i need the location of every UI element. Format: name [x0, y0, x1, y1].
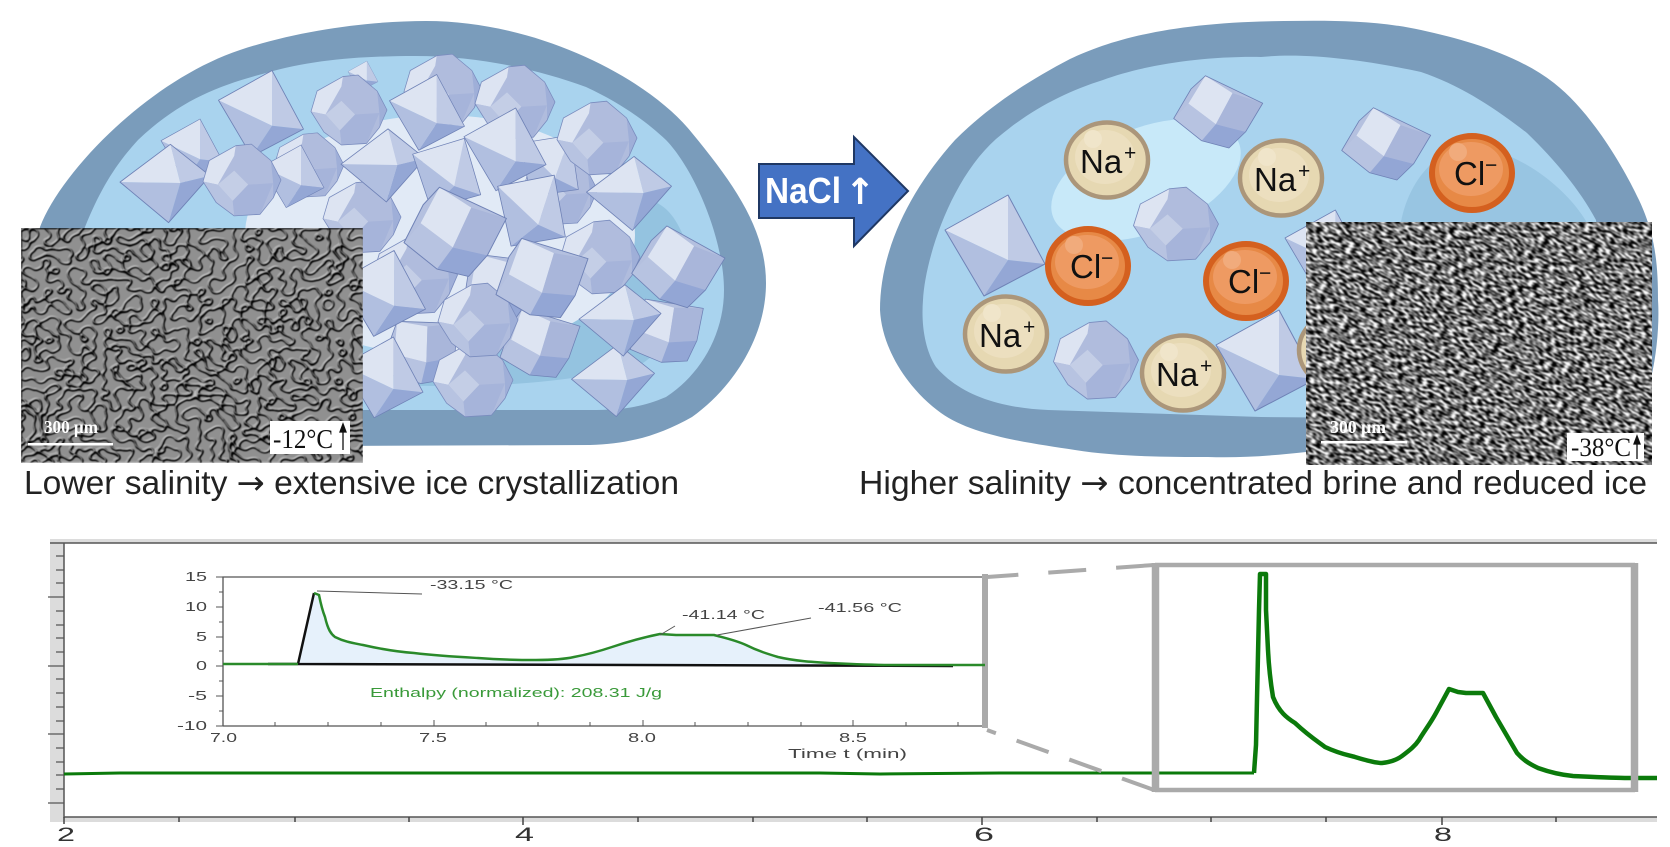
micrograph texture	[1306, 222, 1652, 465]
ion: Cl-: Cl	[1070, 248, 1101, 285]
inset x labels: 7.0	[210, 730, 237, 745]
ion: Cl-	[1432, 136, 1512, 210]
ion: partly hidden Na+	[1299, 312, 1381, 388]
annotation arrows	[317, 591, 811, 635]
peak label: -41.14 °C	[682, 608, 765, 622]
inner shaded region	[380, 200, 688, 386]
ice crystals	[945, 72, 1434, 411]
ion: Na+	[1142, 336, 1224, 410]
integration baseline	[268, 593, 953, 666]
scale label: 300 µm	[1330, 417, 1386, 437]
zoom box	[1155, 565, 1635, 790]
micrograph texture	[21, 228, 363, 463]
main chart: DSC thermogram	[48, 539, 1657, 846]
ion: Na+: +	[1124, 142, 1136, 165]
ice crystal cluster	[120, 54, 729, 418]
droplet outer shell	[30, 21, 766, 446]
ion: Na+	[965, 296, 1047, 372]
ion: Na+: Na	[1254, 161, 1296, 198]
ion: Cl-: −	[1485, 154, 1497, 177]
inset y labels: 0	[196, 658, 207, 673]
chart frame lines	[50, 543, 1657, 817]
scale bar	[28, 443, 113, 446]
ion: Cl-: −	[1101, 247, 1113, 270]
temperature tag: -38°C	[1571, 433, 1631, 462]
x-axis labels	[57, 825, 1452, 846]
x-axis labels: 2	[57, 825, 75, 846]
inset x labels: 7.5	[419, 730, 447, 745]
inset chart	[177, 569, 985, 761]
inset y labels	[177, 569, 207, 733]
ion: Na+	[1066, 122, 1148, 198]
x-axis labels: 8	[1434, 825, 1452, 846]
zoom connector top	[987, 565, 1154, 577]
zoom connector bottom	[987, 730, 1154, 790]
droplet inner brine	[60, 56, 724, 410]
pale gaps between crystals	[245, 115, 635, 355]
thermogram peaks	[1254, 574, 1657, 778]
ion: Na+: +	[1298, 160, 1310, 183]
inset x labels: 8.0	[628, 730, 656, 745]
inset x labels	[210, 730, 867, 745]
panel: higher salinity droplet	[880, 21, 1658, 457]
temperature tag: -12°C	[273, 424, 333, 454]
arrow: NaCl increase	[759, 137, 908, 246]
zoom box sides	[1156, 563, 1634, 792]
y-axis ticks	[48, 556, 64, 803]
scale bar	[1321, 441, 1407, 444]
droplet inner brine	[923, 56, 1620, 420]
inset frame	[223, 577, 982, 726]
dark brine patch	[1400, 146, 1590, 228]
ion: Na+	[1240, 140, 1322, 216]
enthalpy label: Enthalpy (normalized): 208.31 J/g	[370, 685, 662, 700]
inset right border	[982, 574, 988, 728]
ion: Na+: +	[1023, 316, 1035, 339]
x-axis labels: 4	[515, 825, 535, 846]
droplet outer shell	[880, 21, 1658, 457]
inset ticks	[216, 577, 958, 726]
inset y labels: 5	[196, 629, 207, 644]
inset x-axis title: Time t (min)	[788, 747, 907, 761]
ion: Cl-	[1206, 244, 1286, 318]
inset x labels: 8.5	[839, 730, 867, 745]
caption: higher salinity: Higher salinity → concentrated brine and reduced ice	[859, 463, 1647, 502]
peak label: -41.56 °C	[818, 601, 902, 615]
axis shadow bands	[50, 539, 1657, 822]
caption: lower salinity: Lower salinity → extensive ice crystallization	[24, 463, 679, 502]
x-axis ticks	[64, 817, 1556, 825]
peak area fill	[298, 593, 893, 665]
ion: Na+: Na	[979, 317, 1021, 354]
inset y labels: 15	[185, 569, 207, 584]
ion: Na+: Na	[1080, 143, 1122, 180]
micrograph: lower salinity	[21, 228, 363, 463]
scale label: 300 µm	[44, 417, 98, 437]
x-axis labels: 6	[974, 825, 994, 846]
ion: Na+: Na	[1156, 356, 1198, 393]
ion: Cl-	[1048, 229, 1128, 303]
inset y labels: 10	[185, 599, 207, 614]
light brine patch	[1034, 94, 1258, 266]
inset curve	[223, 593, 985, 665]
ion: Cl-: Cl	[1454, 155, 1485, 192]
inset background	[223, 577, 985, 726]
ion: Na+: +	[1200, 355, 1212, 378]
inset y labels: -5	[188, 688, 207, 703]
inset y labels: -10	[177, 718, 207, 733]
thermogram baseline	[64, 773, 1254, 774]
arrow: NaCl increase: ↑	[845, 172, 875, 213]
micrograph: higher salinity	[1306, 222, 1652, 465]
panel: lower salinity droplet	[30, 21, 766, 446]
arrow: NaCl increase: NaCl	[765, 170, 841, 211]
micrograph background	[1306, 222, 1652, 465]
ion: Cl-: Cl	[1228, 263, 1259, 300]
peak label: -33.15 °C	[430, 578, 513, 592]
ion: Cl-: −	[1259, 262, 1271, 285]
